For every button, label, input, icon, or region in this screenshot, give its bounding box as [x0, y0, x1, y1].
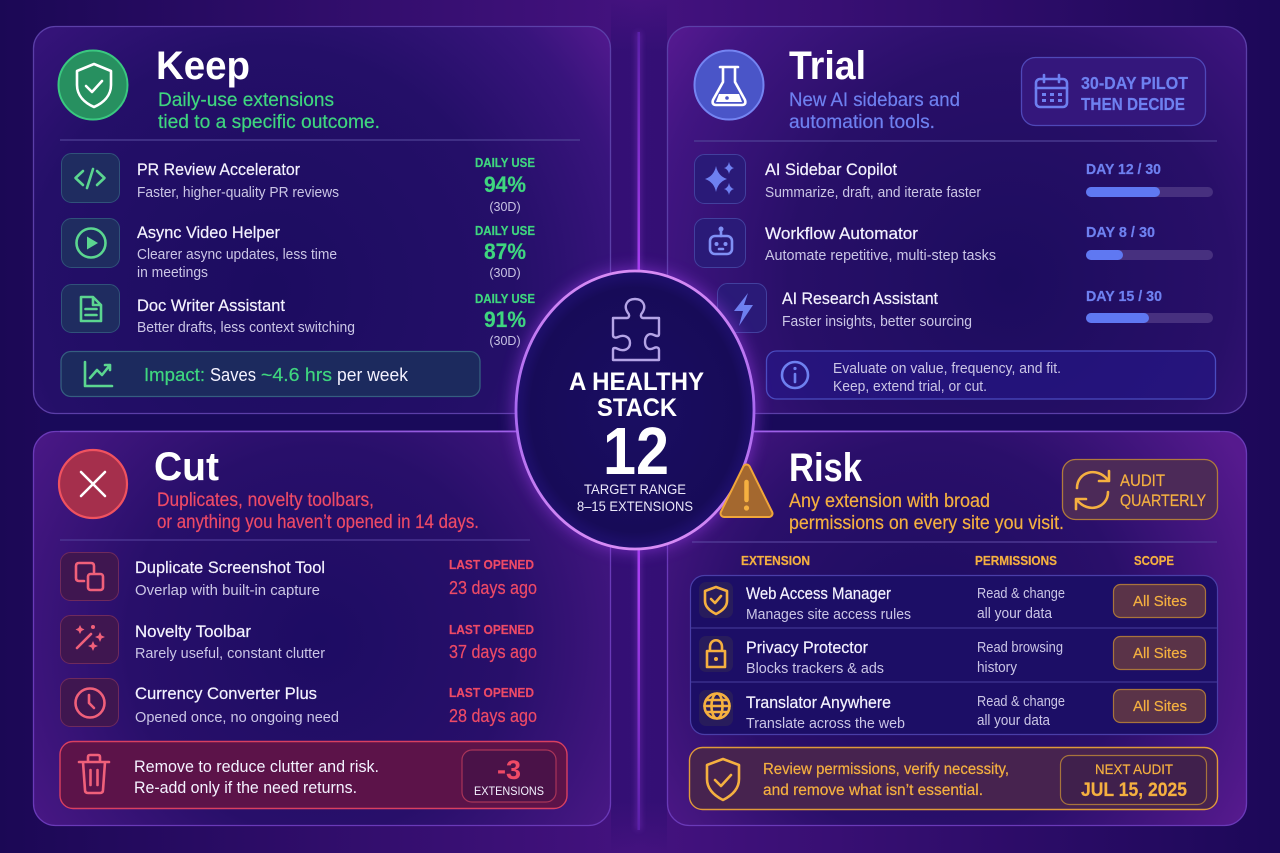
- impact callout: Saves: [210, 365, 256, 385]
- row: Workflow Automator: Automate repetitive, multi-step tasks: [765, 248, 996, 264]
- Trial subtitle: [789, 89, 960, 133]
- Keep heading: Keep: [156, 44, 250, 88]
- row: Web Access Manager: Read & change: [977, 586, 1065, 602]
- badge: minus 3 extensions: EXTENSIONS: [474, 784, 544, 798]
- row: Duplicate Screenshot Tool: Duplicate Screenshot Tool: [135, 558, 325, 577]
- panel: Cut: [34, 432, 610, 826]
- row: Workflow Automator: [694, 218, 1213, 268]
- hub title: STACK: [597, 394, 677, 422]
- permissions table: [690, 576, 1218, 734]
- row: Workflow Automator: Workflow Automator: [765, 224, 918, 243]
- Keep subtitle: Daily-use extensions: [158, 89, 334, 111]
- row: AI Sidebar Copilot: AI Sidebar Copilot: [765, 160, 897, 179]
- row: Doc Writer Assistant: (30D): [489, 334, 521, 348]
- info callout: Evaluate on value, frequency, and fit.: [833, 361, 1061, 377]
- Cut icon: X: [59, 450, 127, 518]
- row: Duplicate Screenshot Tool: 23 days ago: [449, 578, 537, 598]
- row: Novelty Toolbar: [60, 616, 537, 664]
- Risk heading: Risk: [789, 446, 863, 490]
- Keep subtitle: tied to a specific outcome.: [158, 111, 380, 133]
- row: PR Review Accelerator: (30D): [489, 200, 521, 214]
- Risk subtitle: [789, 490, 1064, 534]
- row: AI Sidebar Copilot: [694, 154, 1213, 204]
- Cut heading: Cut: [154, 445, 219, 489]
- next audit badge: [1060, 756, 1206, 804]
- impact callout: [61, 352, 480, 396]
- row: Privacy Protector: history: [977, 660, 1018, 676]
- pilot badge: THEN DECIDE: [1081, 94, 1185, 114]
- table header: EXTENSION: [741, 554, 810, 568]
- audit badge: AUDIT: [1120, 472, 1165, 490]
- row: Privacy Protector: [699, 636, 1206, 677]
- Trial subtitle: automation tools.: [789, 111, 935, 133]
- row: Web Access Manager: Web Access Manager: [746, 585, 891, 603]
- row: Doc Writer Assistant: 91%: [484, 307, 526, 332]
- cut callout: [60, 742, 567, 808]
- Cut subtitle: or anything you haven’t opened in 14 days.: [157, 511, 479, 533]
- info callout: [766, 351, 1216, 399]
- panel: Keep: [34, 26, 610, 414]
- cut callout: Remove to reduce clutter and risk.: [134, 758, 379, 776]
- risk callout: [690, 748, 1218, 810]
- row: Privacy Protector: All Sites: [1133, 645, 1187, 662]
- row: Translator Anywhere: Translator Anywhere: [746, 694, 891, 712]
- Keep icon: shield check: [58, 50, 128, 120]
- row: Currency Converter Plus: Currency Converter Plus: [135, 684, 317, 703]
- panel: Trial: [668, 26, 1246, 414]
- table header: SCOPE: [1134, 554, 1174, 568]
- panel: Risk: [668, 432, 1246, 826]
- Keep subtitle: [158, 89, 380, 133]
- Risk icon: warning triangle: [724, 468, 769, 514]
- risk callout: Review permissions, verify necessity,: [763, 761, 1009, 778]
- audit badge: QUARTERLY: [1120, 492, 1206, 510]
- row: Currency Converter Plus: 28 days ago: [449, 706, 537, 726]
- row: PR Review Accelerator: Faster, higher-quality PR reviews: [137, 185, 339, 201]
- row: Web Access Manager: Manages site access rules: [746, 607, 911, 623]
- impact callout: ~4.6 hrs: [261, 365, 332, 385]
- row: Currency Converter Plus: [60, 678, 537, 726]
- row: AI Sidebar Copilot: Summarize, draft, and iterate faster: [765, 185, 981, 201]
- row: Duplicate Screenshot Tool: Overlap with built-in capture: [135, 583, 320, 599]
- row: Duplicate Screenshot Tool: [60, 552, 537, 600]
- hub target range: [577, 482, 693, 514]
- row: Novelty Toolbar: Novelty Toolbar: [135, 622, 251, 641]
- Cut subtitle: [157, 489, 479, 533]
- row: Currency Converter Plus: LAST OPENED: [449, 686, 534, 700]
- row: PR Review Accelerator: 94%: [484, 172, 526, 197]
- row: PR Review Accelerator: [62, 154, 535, 214]
- row: Translator Anywhere: Read & change: [977, 694, 1065, 710]
- row: Web Access Manager: All Sites: [1133, 593, 1187, 610]
- row: Privacy Protector: Blocks trackers & ads: [746, 661, 884, 677]
- row: Translator Anywhere: Translate across the web: [746, 716, 905, 732]
- row: Workflow Automator: DAY 8 / 30: [1086, 225, 1155, 241]
- row: PR Review Accelerator: DAILY USE: [475, 156, 535, 170]
- icon: puzzle piece: [613, 299, 659, 360]
- row: AI Research Assistant: AI Research Assistant: [782, 289, 938, 308]
- row: Novelty Toolbar: 37 days ago: [449, 642, 537, 662]
- row: Novelty Toolbar: LAST OPENED: [449, 623, 534, 637]
- row: Doc Writer Assistant: DAILY USE: [475, 292, 535, 306]
- badge: minus 3 extensions: [462, 750, 556, 802]
- hub target range: TARGET RANGE: [584, 482, 686, 497]
- row: Web Access Manager: all your data: [977, 606, 1053, 622]
- row: AI Sidebar Copilot: DAY 12 / 30: [1086, 162, 1161, 178]
- next audit badge: NEXT AUDIT: [1095, 761, 1173, 777]
- row: Duplicate Screenshot Tool: LAST OPENED: [449, 558, 534, 572]
- risk callout: and remove what isn’t essential.: [763, 782, 983, 799]
- centre hub: a healthy stack: [514, 269, 756, 551]
- row: PR Review Accelerator: PR Review Accelerator: [137, 160, 300, 179]
- row: Privacy Protector: Read browsing: [977, 640, 1063, 656]
- row: Translator Anywhere: All Sites: [1133, 698, 1187, 715]
- pilot badge: [1022, 58, 1206, 126]
- row: Async Video Helper: Async Video Helper: [137, 223, 280, 242]
- table header: PERMISSIONS: [975, 554, 1057, 568]
- row: Async Video Helper: 87%: [484, 239, 526, 264]
- hub target range: 8–15 EXTENSIONS: [577, 499, 693, 514]
- row: Async Video Helper: (30D): [489, 266, 521, 280]
- row: Async Video Helper: Clearer async updates, less time: [137, 247, 337, 263]
- row: AI Research Assistant: Faster insights, better sourcing: [782, 314, 972, 330]
- row: Translator Anywhere: [699, 690, 1206, 732]
- hub number: 12: [603, 414, 669, 489]
- row: AI Research Assistant: DAY 15 / 30: [1086, 289, 1162, 305]
- pilot badge: 30-DAY PILOT: [1081, 73, 1188, 93]
- row: Doc Writer Assistant: Doc Writer Assistant: [137, 296, 285, 315]
- hub title: A HEALTHY: [569, 368, 704, 396]
- row: Currency Converter Plus: Opened once, no ongoing need: [135, 710, 339, 726]
- row: Async Video Helper: in meetings: [137, 265, 208, 281]
- row: Novelty Toolbar: Rarely useful, constant clutter: [135, 646, 325, 662]
- next audit badge: JUL 15, 2025: [1081, 780, 1187, 801]
- audit badge: [1062, 460, 1218, 520]
- Risk subtitle: permissions on every site you visit.: [789, 512, 1064, 534]
- Trial heading: Trial: [789, 44, 866, 88]
- Risk subtitle: Any extension with broad: [789, 490, 990, 512]
- hub title: [569, 368, 704, 422]
- row: Doc Writer Assistant: [62, 284, 535, 348]
- row: AI Research Assistant: [718, 284, 1213, 332]
- Trial icon: flask: [694, 50, 764, 120]
- table header: [741, 554, 1174, 568]
- impact callout: per week: [337, 365, 409, 385]
- Cut subtitle: Duplicates, novelty toolbars,: [157, 489, 374, 511]
- info callout: Keep, extend trial, or cut.: [833, 379, 987, 395]
- row: Translator Anywhere: all your data: [977, 713, 1051, 729]
- row: Async Video Helper: [62, 218, 535, 281]
- row: Doc Writer Assistant: Better drafts, less context switching: [137, 320, 355, 336]
- row: Privacy Protector: Privacy Protector: [746, 639, 868, 657]
- Trial subtitle: New AI sidebars and: [789, 89, 960, 111]
- row: Web Access Manager: [699, 582, 1206, 623]
- row: Async Video Helper: DAILY USE: [475, 224, 535, 238]
- cut callout: Re-add only if the need returns.: [134, 779, 357, 797]
- badge: minus 3 extensions: -3: [497, 755, 521, 785]
- impact callout: Impact:: [144, 365, 205, 385]
